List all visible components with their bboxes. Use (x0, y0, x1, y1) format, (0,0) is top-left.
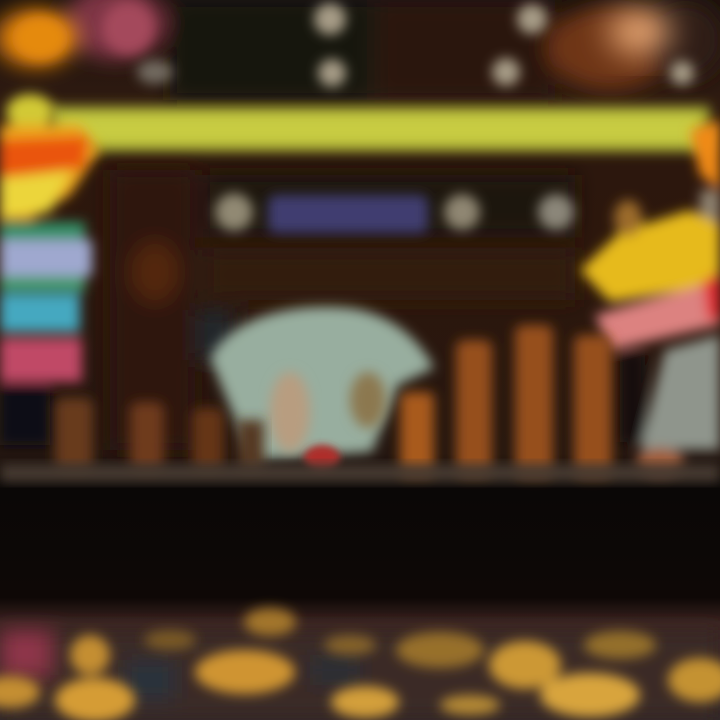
yellow header band (50, 106, 710, 152)
right badge (580, 120, 720, 476)
top left details (12, 2, 173, 84)
top dots (314, 3, 694, 87)
baseline strip (0, 464, 720, 482)
top highlights (608, 10, 672, 54)
top band (0, 0, 720, 100)
fan shape chart (210, 307, 434, 471)
bottom floor pattern (0, 630, 720, 720)
gold pieces (0, 608, 720, 720)
left badge stack (0, 94, 100, 445)
heading dots and bar (215, 193, 574, 233)
chart: bars (55, 325, 612, 477)
panel: dark central area (110, 170, 575, 450)
